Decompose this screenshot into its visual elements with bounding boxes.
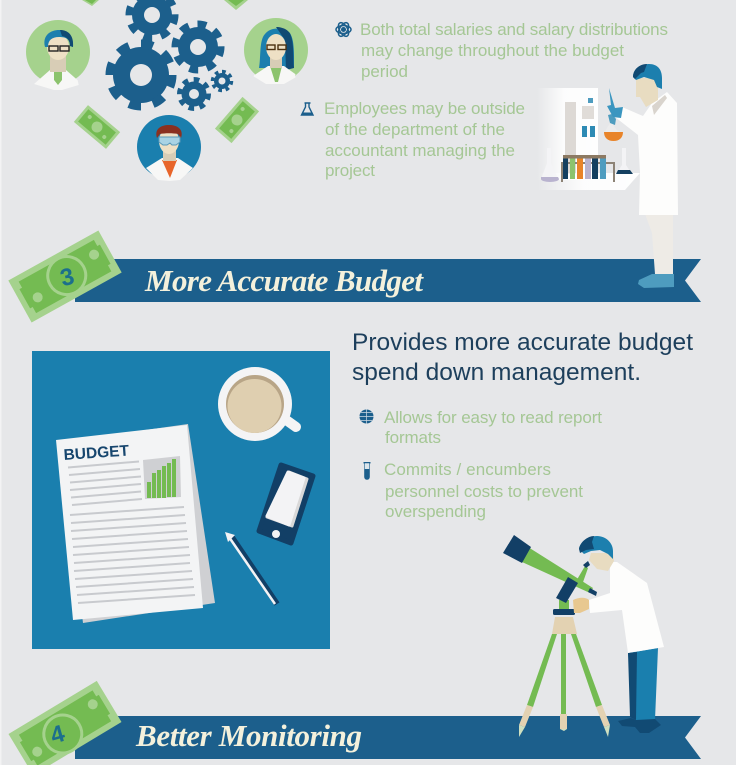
text: employees bullet: project	[325, 161, 375, 180]
illustration: scientist with telescope	[503, 535, 664, 737]
panel: desk illustration	[32, 351, 330, 649]
text: report formats bullet: formats	[385, 428, 441, 447]
icon: flask	[301, 103, 314, 116]
text: salaries bullet: may change throughout the budget	[361, 41, 624, 60]
icon: scientist avatar left	[26, 20, 90, 90]
ribbon title: More Accurate Budget	[144, 263, 424, 298]
icon: coffee cup	[218, 367, 296, 441]
ribbon: More Accurate Budget	[75, 259, 701, 302]
icon: scientist avatar right	[244, 18, 308, 84]
mini bar chart	[143, 456, 181, 499]
icon: atom	[336, 21, 351, 38]
scientist head	[579, 536, 614, 571]
illustration: scientist with flask	[607, 64, 678, 288]
text: personnel costs bullet: Commits / encumbers	[384, 460, 551, 479]
heading: spend down management	[352, 329, 693, 386]
text: salaries bullet	[360, 20, 668, 81]
text: employees bullet: accountant managing the	[325, 141, 515, 160]
text: employees bullet	[324, 99, 525, 180]
heading: spend down management: spend down management.	[352, 359, 641, 386]
icon: partial money bill top right	[224, 0, 248, 10]
text: personnel costs bullet	[384, 460, 583, 521]
icon: money bill 4: 4	[47, 720, 68, 750]
icon: money bill left	[74, 105, 120, 149]
icon: globe	[360, 410, 374, 424]
icon: money bill 4	[8, 681, 122, 765]
text: employees bullet: Employees may be outside	[324, 99, 525, 118]
heading: spend down management: Provides more accurate budget	[352, 329, 693, 356]
icon: smartphone	[259, 465, 313, 543]
text: salaries bullet: period	[361, 62, 408, 81]
text: employees bullet: of the department of the	[325, 120, 505, 139]
ribbon title: Better Monitoring	[135, 718, 362, 753]
scientist hand	[573, 598, 589, 613]
text: report formats bullet: Allows for easy to read report	[384, 408, 602, 427]
scientist coat	[589, 562, 664, 653]
icon: budget papers	[56, 424, 215, 623]
icon: money bill right	[215, 97, 259, 143]
scientist trousers and shoes	[618, 648, 661, 733]
icon: test tube	[364, 462, 370, 480]
text: salaries bullet: Both total salaries and salary distributions	[360, 20, 668, 39]
label: BUDGET: BUDGET	[63, 442, 130, 464]
icon: money bill 3	[8, 231, 122, 322]
telescope tripod	[519, 600, 610, 737]
icon: pencil	[225, 532, 277, 604]
text: personnel costs bullet: overspending	[385, 502, 486, 521]
telescope	[503, 535, 597, 603]
ribbon: Better Monitoring	[75, 716, 701, 759]
illustration: lab bench	[537, 88, 640, 190]
text: personnel costs bullet: personnel costs to prevent	[385, 482, 583, 501]
icon: money bill 3: 3	[58, 263, 77, 292]
icon: partial money bill top left	[82, 0, 99, 6]
icon: gears	[110, 0, 232, 108]
text: report formats bullet	[384, 408, 602, 447]
icon: scientist avatar bottom	[137, 115, 201, 181]
